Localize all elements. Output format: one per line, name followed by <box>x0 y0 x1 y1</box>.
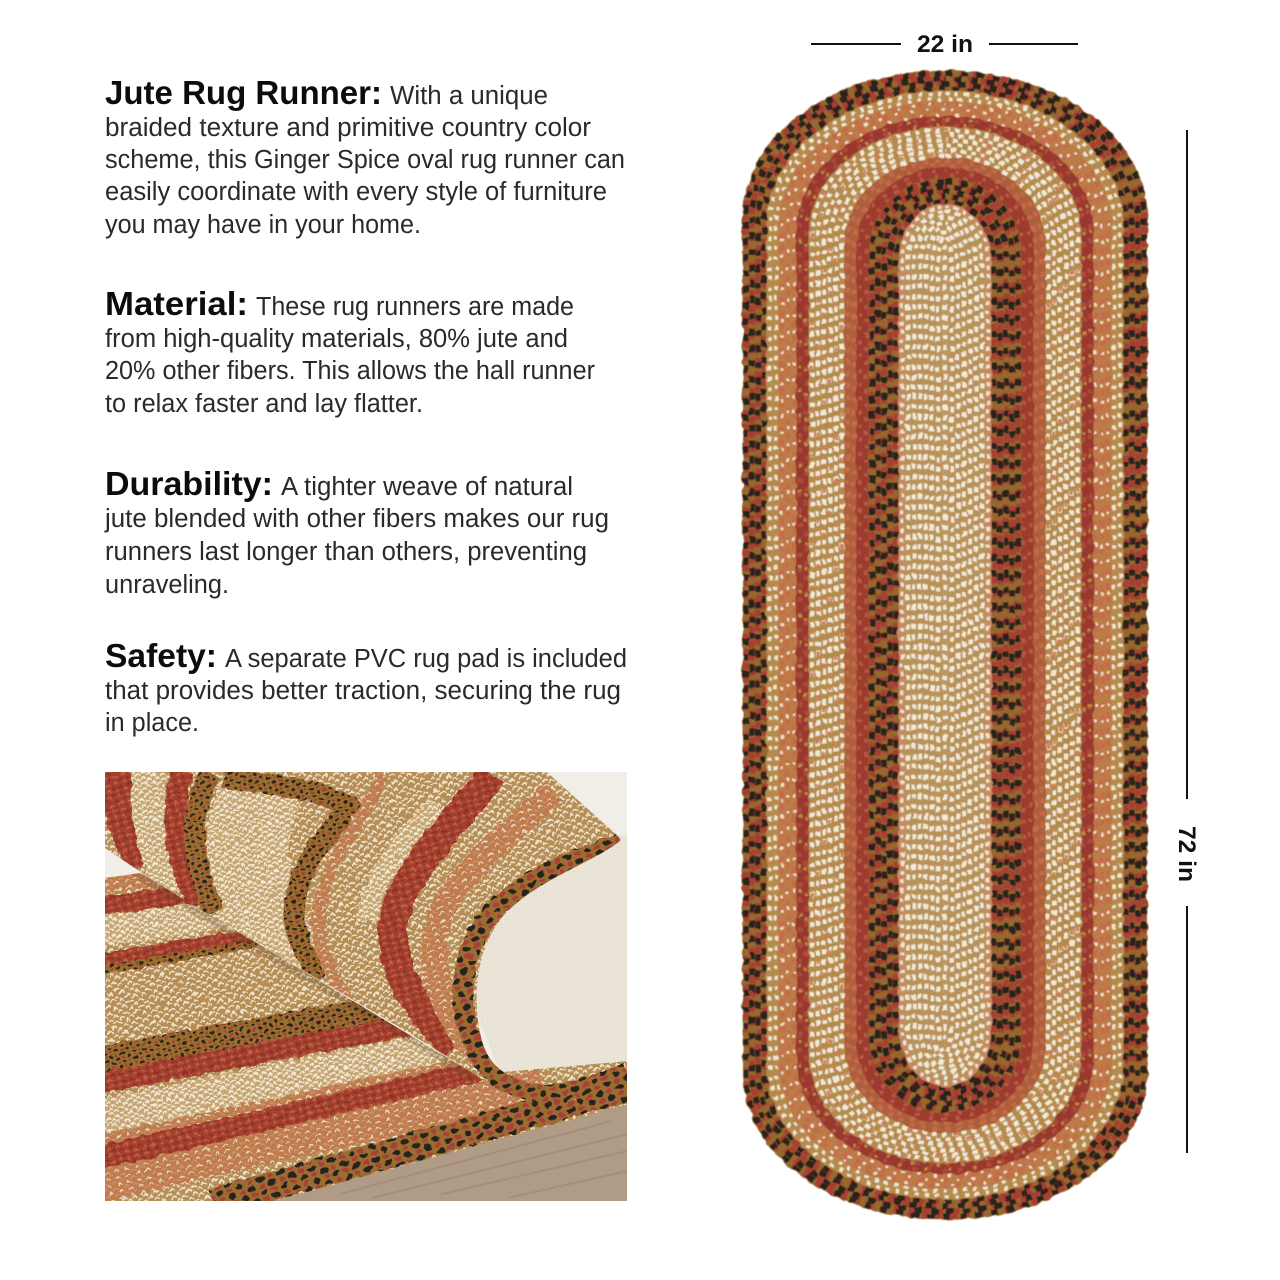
body: Jute Rug Runner description: scheme, this Ginger Spice oval rug runner can <box>105 146 625 174</box>
body: Material description: These rug runners are made <box>256 293 574 321</box>
body: Durability description: runners last longer than others, preventing <box>105 538 587 566</box>
wood floor <box>270 1104 627 1201</box>
body: Safety description: in place. <box>105 709 199 737</box>
outer dark braid band <box>746 74 1144 1217</box>
text block: Jute Rug Runner <box>105 74 625 239</box>
body: Durability description: jute blended with other fibers makes our rug <box>104 505 609 533</box>
flat rug stripes <box>100 852 632 1204</box>
text block: Safety <box>105 637 627 737</box>
body: Safety description <box>105 645 627 737</box>
rug: braided oval runner, top view <box>746 74 1144 1217</box>
body: Jute Rug Runner description: braided texture and primitive country color <box>105 114 592 142</box>
body: Jute Rug Runner description <box>105 82 625 239</box>
body: Safety description: that provides better traction, securing the rug <box>105 677 621 705</box>
height dimension: 72 in: 72 in <box>1173 826 1200 882</box>
text block: Durability <box>104 465 609 599</box>
body: Material description: to relax faster and lay flatter. <box>105 390 423 418</box>
salmon band inner <box>848 161 1042 1129</box>
width dimension: 22 in: 22 in <box>917 31 973 58</box>
body: Material description <box>105 293 595 418</box>
infographic canvas <box>104 34 1196 1222</box>
heading: Jute Rug Runner: Jute Rug Runner: <box>105 74 382 111</box>
inner red band <box>860 171 1030 1119</box>
heading: Material: Material: <box>105 285 248 322</box>
heading: Durability: Durability: <box>105 465 273 502</box>
body: Safety description: A separate PVC rug pad is included <box>225 645 627 673</box>
body: Durability description: unraveling. <box>105 571 229 599</box>
heading: Safety: Safety: <box>105 637 217 674</box>
body: Material description: from high-quality materials, 80% jute and <box>105 325 568 353</box>
cream band <box>812 130 1078 1160</box>
body: Jute Rug Runner description: easily coordinate with every style of furniture <box>105 178 607 206</box>
centre panel <box>908 212 982 1078</box>
salmon band <box>782 104 1108 1186</box>
rug pad underside <box>458 835 627 1098</box>
body: Durability description: A tighter weave of natural <box>281 473 573 501</box>
body: Jute Rug Runner description: With a unique <box>390 82 548 110</box>
body: Jute Rug Runner description: you may have in your home. <box>105 211 421 239</box>
salmon edge of centre panel <box>902 207 988 1083</box>
photo: rug corner folded over showing the PVC pad <box>105 772 627 1201</box>
outer red band <box>800 120 1090 1170</box>
body: Durability description <box>104 473 609 599</box>
text block: Material <box>105 285 595 418</box>
folded rug roll stripes <box>100 765 632 1114</box>
ochre and cream band <box>770 94 1120 1196</box>
inner dark braid band <box>872 181 1018 1109</box>
body: Material description: 20% other fibers. This allows the hall runner <box>105 357 595 385</box>
